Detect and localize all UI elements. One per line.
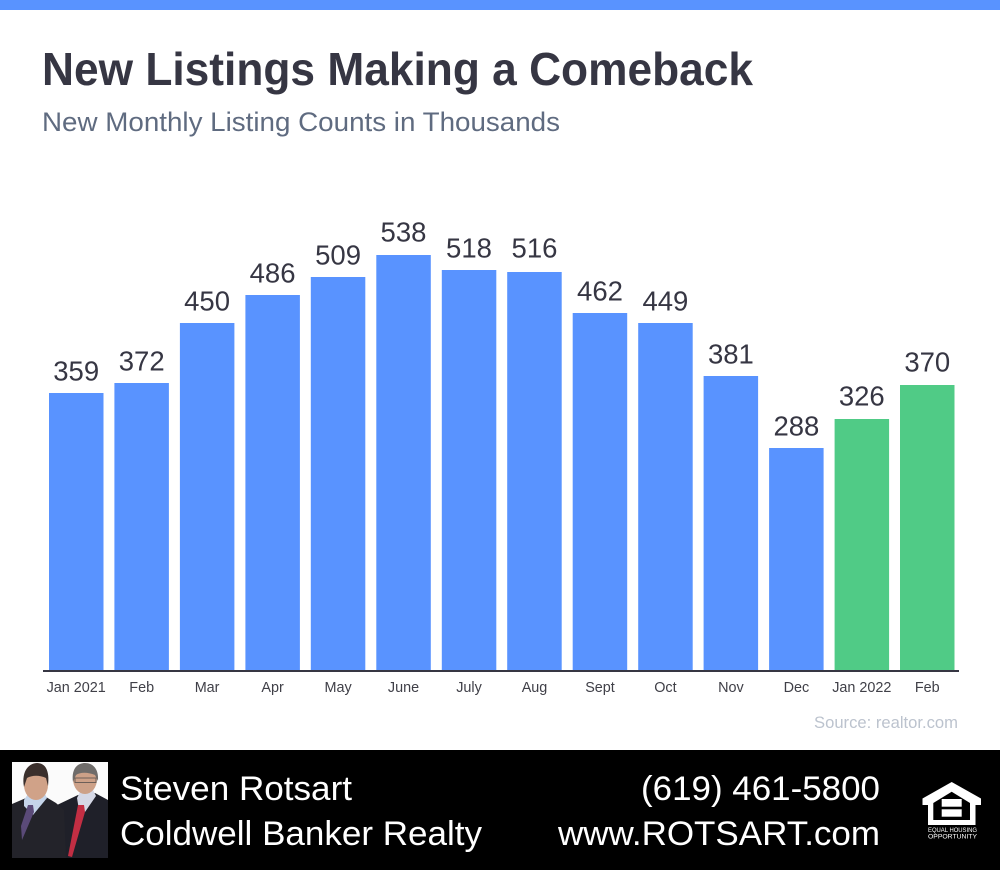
value labels: 326 <box>839 380 885 412</box>
value labels: 462 <box>577 276 623 306</box>
value labels: 449 <box>642 286 688 316</box>
agent name: Steven Rotsart <box>120 770 353 808</box>
title: New Listings Making a Comeback <box>42 43 753 95</box>
month labels: Feb <box>129 680 154 696</box>
icon: equal housing opportunity: OPPORTUNITY <box>928 834 977 840</box>
brokerage: Coldwell Banker Realty <box>120 815 482 853</box>
month labels <box>47 680 940 696</box>
icon: equal housing opportunity <box>922 782 981 840</box>
value labels: 509 <box>315 240 361 270</box>
agent photo <box>12 762 108 858</box>
subtitle: New Monthly Listing Counts in Thousands <box>42 107 560 137</box>
month labels: Oct <box>654 680 677 696</box>
value labels: 518 <box>446 232 492 264</box>
footer band <box>0 750 1000 870</box>
value labels: 288 <box>773 410 819 442</box>
axis line <box>43 670 959 672</box>
month labels: Dec <box>784 680 809 696</box>
value labels <box>53 216 950 442</box>
source note: Source: realtor.com <box>814 714 958 732</box>
website: www.ROTSART.com <box>557 815 880 853</box>
month labels: Apr <box>261 680 284 696</box>
bars: 2022 <box>835 385 954 670</box>
phone: (619) 461-5800 <box>641 770 880 808</box>
value labels: 381 <box>708 338 754 370</box>
month labels: Jan 2022 <box>832 680 891 696</box>
month labels: May <box>325 680 352 696</box>
value labels: 359 <box>53 356 99 386</box>
left agent <box>12 763 66 858</box>
value labels: 372 <box>119 346 165 376</box>
month labels: Jan 2021 <box>47 680 106 696</box>
month labels: Sept <box>585 680 615 696</box>
bar chart <box>43 216 959 696</box>
value labels: 516 <box>512 232 557 264</box>
icon: equal housing opportunity: EQUAL HOUSING <box>928 827 977 834</box>
month labels: July <box>456 680 483 696</box>
right agent <box>57 763 108 858</box>
value labels: 370 <box>904 346 950 378</box>
value labels: 538 <box>381 216 426 248</box>
month labels: June <box>388 680 419 696</box>
value labels: 450 <box>184 286 230 316</box>
month labels: Nov <box>718 680 744 696</box>
month labels: Aug <box>522 680 547 696</box>
month labels: Mar <box>195 680 220 696</box>
bars: 2021 <box>49 255 824 670</box>
month labels: Feb <box>915 680 940 696</box>
value labels: 486 <box>250 258 296 288</box>
top accent bar <box>0 0 1000 10</box>
